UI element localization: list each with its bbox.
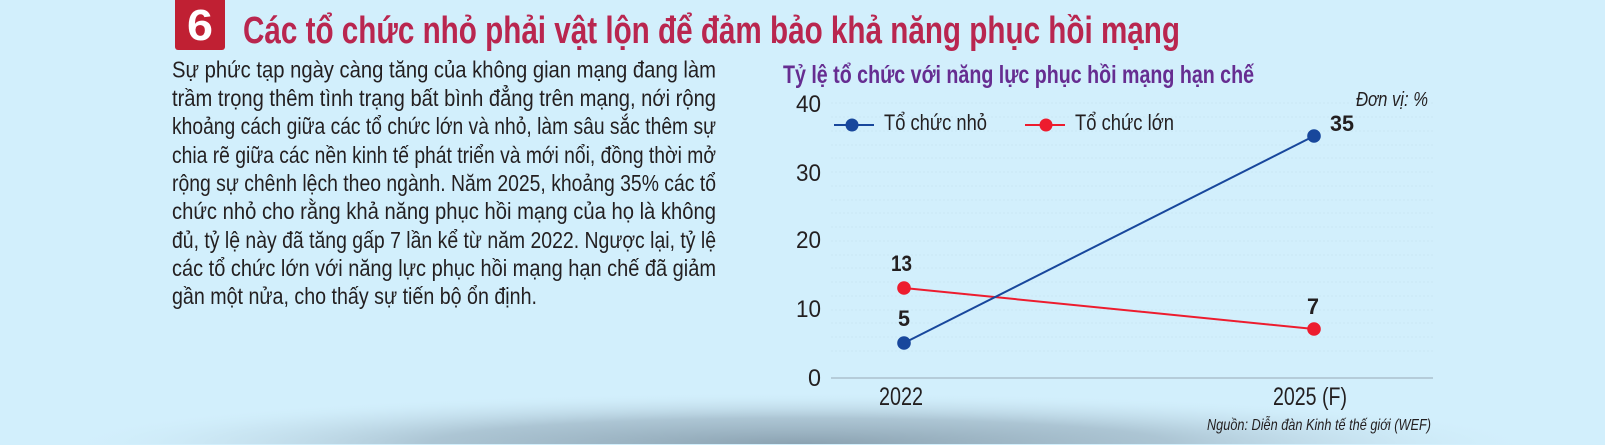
chart title: Tỷ lệ tổ chức với năng lực phục hồi mạng hạn chế: [783, 61, 1254, 89]
title: Các tổ chức nhỏ phải vật lộn để đảm bảo khả năng phục hồi mạng: [243, 10, 1180, 52]
value labels: 5: [898, 306, 910, 331]
body text: gần một nửa, cho thấy sự tiến bộ ổn định.: [172, 283, 537, 309]
y axis labels: 10: [796, 296, 821, 323]
y axis labels: [796, 91, 821, 392]
body text: chia rẽ giữa các nền kinh tế phát triển và mới nổi, đồng thời mở: [172, 142, 716, 168]
body text: Sự phức tạp ngày càng tăng của không gian mạng đang làm: [172, 56, 716, 82]
y axis labels: 30: [796, 160, 821, 187]
y axis labels: 0: [808, 365, 821, 392]
bottom shadow: [60, 392, 1540, 444]
unit note: Đơn vị: %: [1356, 89, 1428, 111]
value labels: 35: [1330, 111, 1354, 136]
legend: large organisations: [1025, 110, 1174, 135]
section number badge: [175, 0, 225, 50]
body text: chức nhỏ cho rằng khả năng phục hồi mạng của họ là không: [172, 198, 716, 224]
legend: small organisations: Tổ chức nhỏ: [884, 110, 987, 135]
body text: khoảng cách giữa các tổ chức lớn và nhỏ, làm sâu sắc thêm sự: [172, 113, 716, 139]
x axis labels: 2022: [879, 383, 923, 411]
body text: rộng sự chênh lệch theo ngành. Năm 2025, khoảng 35% các tổ: [172, 170, 716, 196]
section number badge: 6: [187, 1, 213, 50]
legend: small organisations: [834, 110, 987, 135]
series: small organisations: [897, 129, 1321, 350]
series: large organisations: [897, 281, 1321, 336]
value labels: 7: [1307, 294, 1319, 319]
value labels: [891, 111, 1354, 331]
body text: đủ, tỷ lệ này đã tăng gấp 7 lần kể từ năm 2022. Ngược lại, tỷ lệ: [172, 227, 716, 253]
x axis labels: [879, 383, 1347, 411]
legend: large organisations: Tổ chức lớn: [1075, 110, 1174, 135]
body text: [172, 56, 716, 309]
source note: Nguồn: Diễn đàn Kinh tế thế giới (WEF): [1207, 415, 1431, 434]
y axis labels: 40: [796, 91, 821, 118]
line chart: [796, 91, 1433, 411]
body text: các tổ chức lớn với năng lực phục hồi mạng hạn chế đã giảm: [172, 255, 716, 281]
y axis labels: 20: [796, 227, 821, 254]
body text: trầm trọng thêm tình trạng bất bình đẳng trên mạng, nới rộng: [172, 83, 716, 111]
value labels: 13: [891, 251, 912, 276]
x axis labels: 2025 (F): [1273, 383, 1347, 411]
